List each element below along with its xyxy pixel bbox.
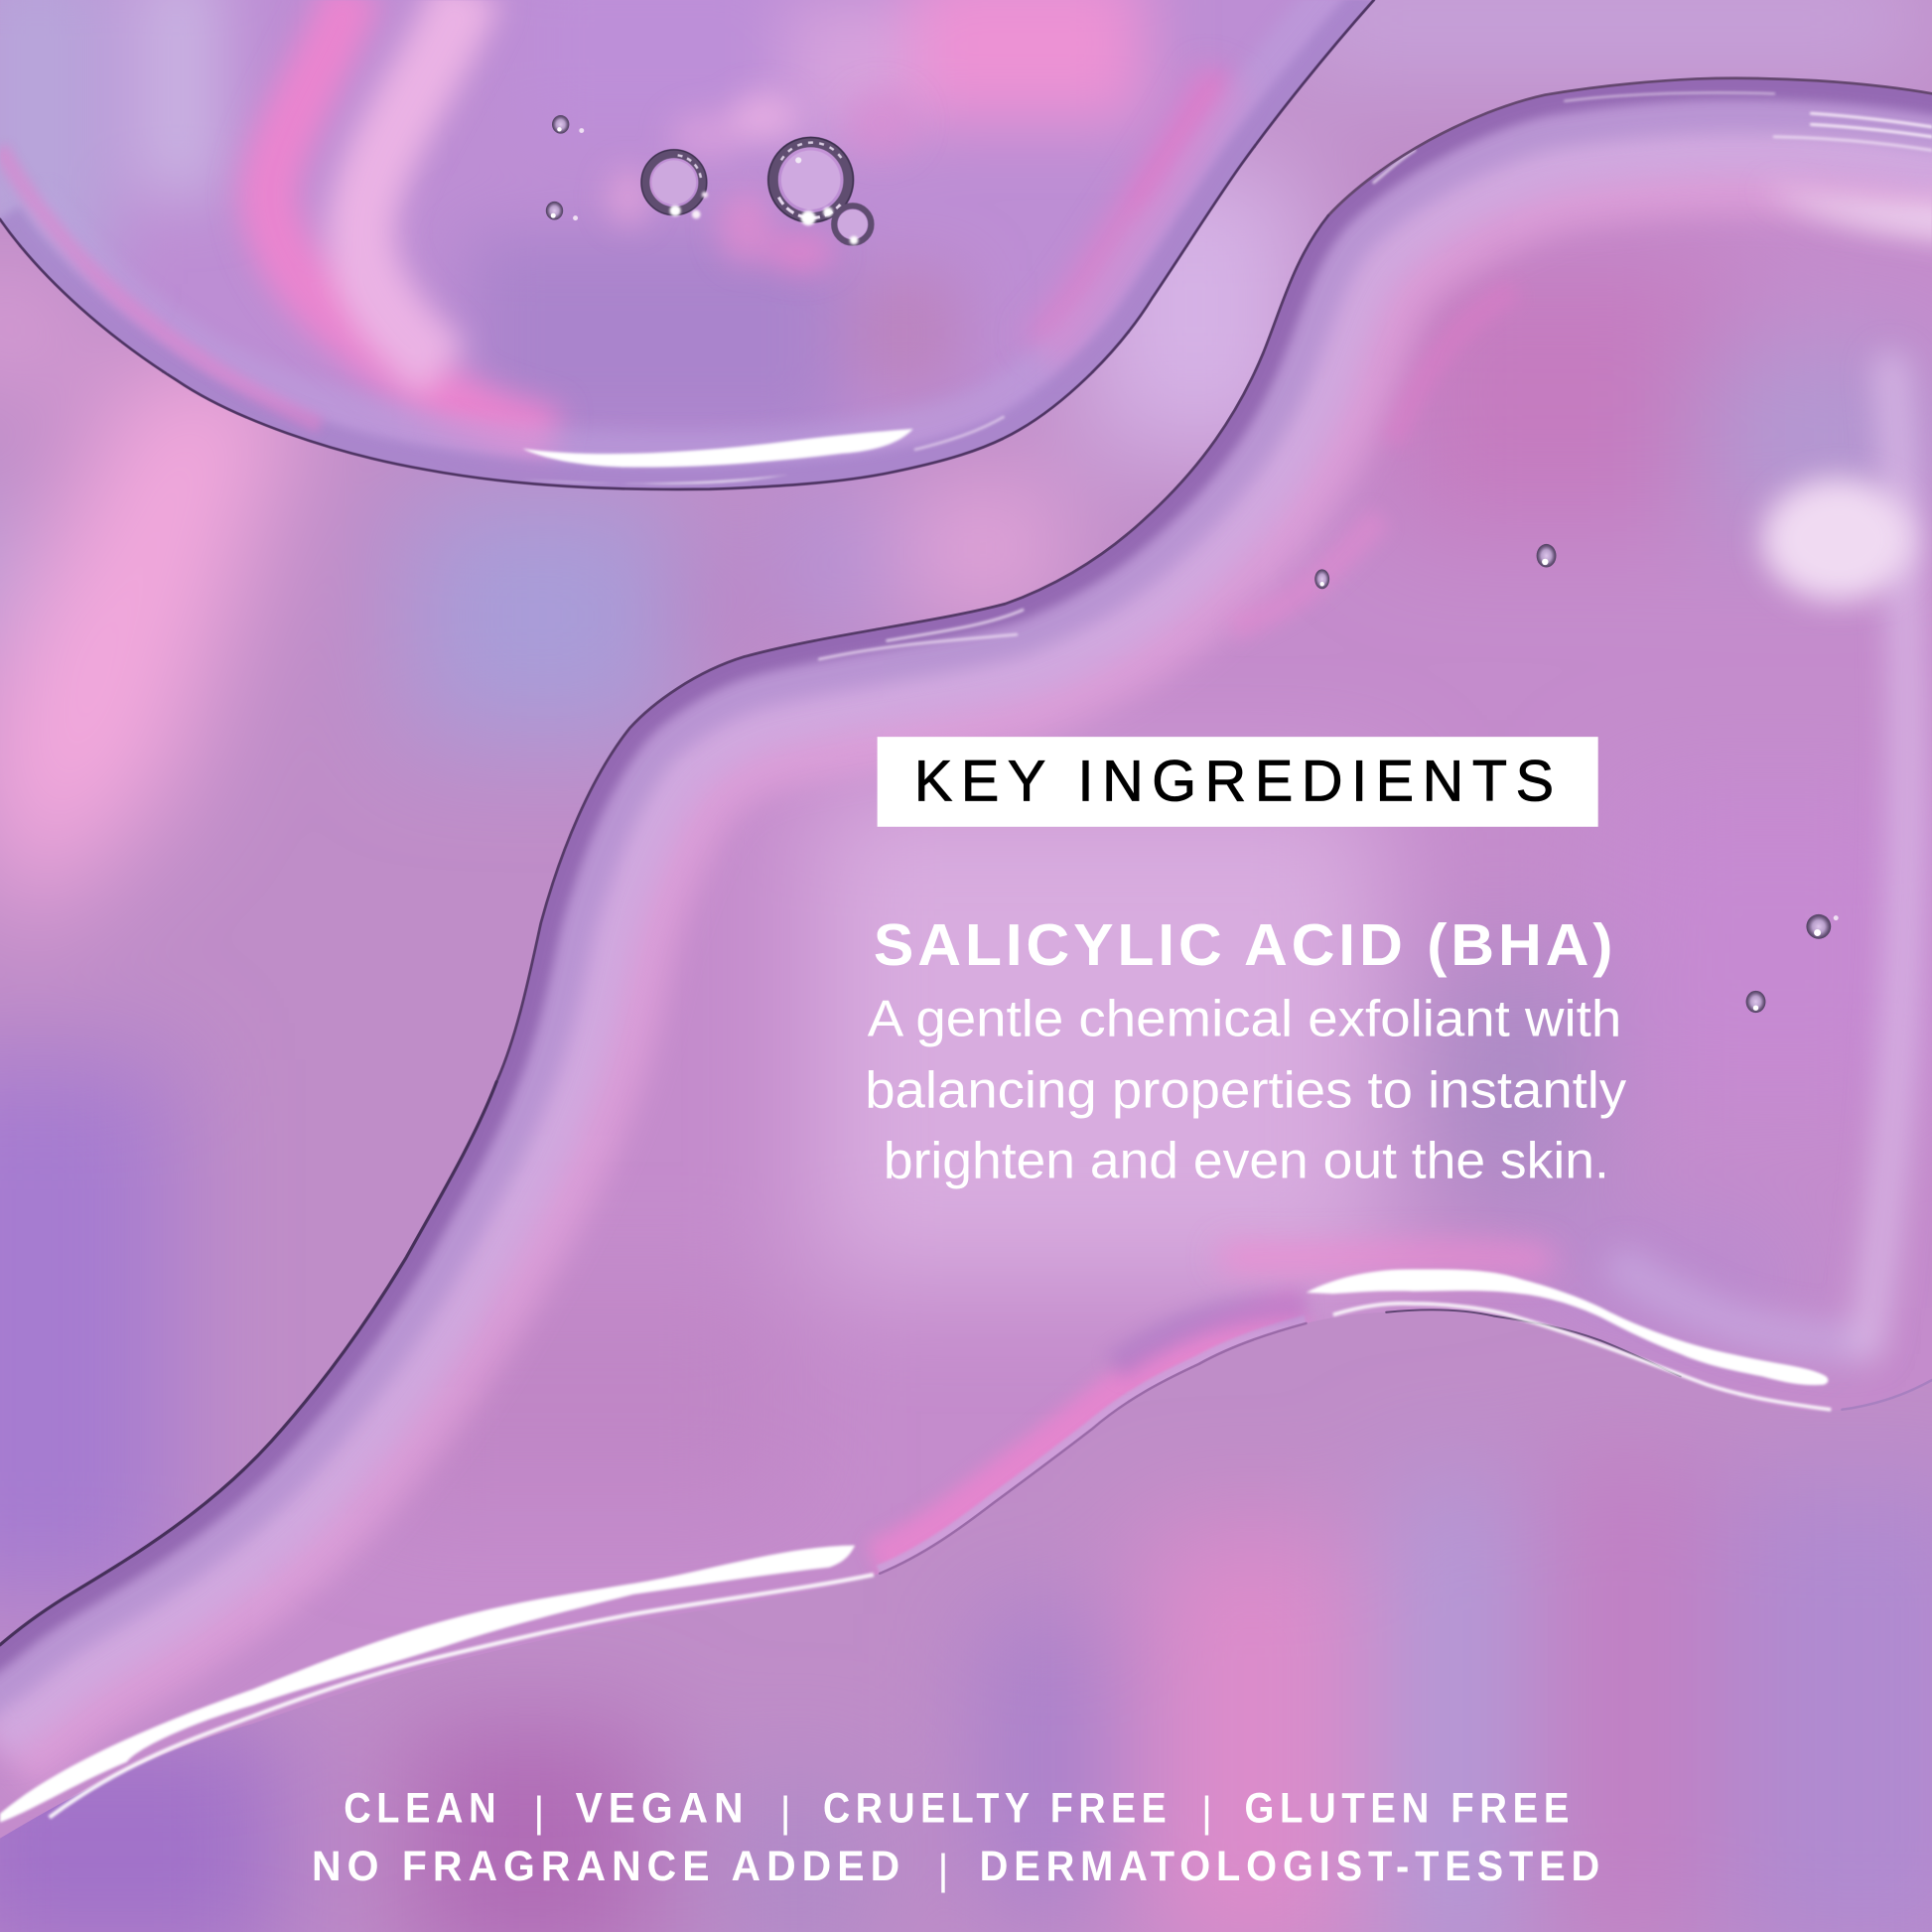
- heading badge: key ingredients: KEY INGREDIENTS: [914, 750, 1563, 814]
- gel edge: white highlights: [0, 1269, 1831, 1823]
- claims footer: |: [1201, 1788, 1212, 1835]
- gel swirl: top-left blob: [0, 0, 1374, 489]
- highlight: lower-left swoosh: [0, 1545, 855, 1823]
- highlight: bottom-right underline: [1333, 1304, 1831, 1410]
- ingredient description: A gentle chemical exfoliant with: [868, 991, 1621, 1048]
- small attached bubble: [834, 206, 871, 244]
- claims footer: CLEAN: [344, 1785, 501, 1832]
- claims footer: NO FRAGRANCE ADDED: [312, 1843, 905, 1889]
- medium bubble: [641, 150, 708, 218]
- claims footer: GLUTEN FREE: [1244, 1785, 1575, 1832]
- bubble halos: [607, 88, 918, 272]
- top blob rim: [0, 0, 1374, 489]
- rim streaks: [819, 92, 1932, 659]
- highlight: bottom-right swoosh: [1307, 1269, 1828, 1385]
- top blob streaks: [269, 0, 1223, 438]
- claims footer: |: [937, 1847, 948, 1893]
- claims footer: CRUELTY FREE: [823, 1785, 1172, 1832]
- claims footer: [312, 1785, 1605, 1893]
- soft light spots: [1762, 188, 1932, 602]
- tiny bubbles top: [546, 115, 584, 220]
- claims footer: |: [780, 1788, 791, 1835]
- ingredient description: brighten and even out the skin.: [884, 1132, 1609, 1189]
- highlight: lower-left underline: [50, 1575, 874, 1818]
- ingredient description: [865, 991, 1626, 1189]
- top blob highlight: [522, 416, 1004, 483]
- heading badge: key ingredients: [878, 737, 1598, 827]
- tiny bubbles in main blob: [1314, 544, 1839, 1013]
- bubbles in top blob: [546, 115, 871, 244]
- claims footer: VEGAN: [576, 1785, 750, 1832]
- ingredient name: SALICYLIC ACID (BHA): [874, 911, 1616, 978]
- claims footer: DERMATOLOGIST-TESTED: [980, 1843, 1605, 1889]
- large bubble: [768, 137, 853, 225]
- ingredient description: balancing properties to instantly: [865, 1062, 1626, 1120]
- claims footer: |: [533, 1788, 544, 1835]
